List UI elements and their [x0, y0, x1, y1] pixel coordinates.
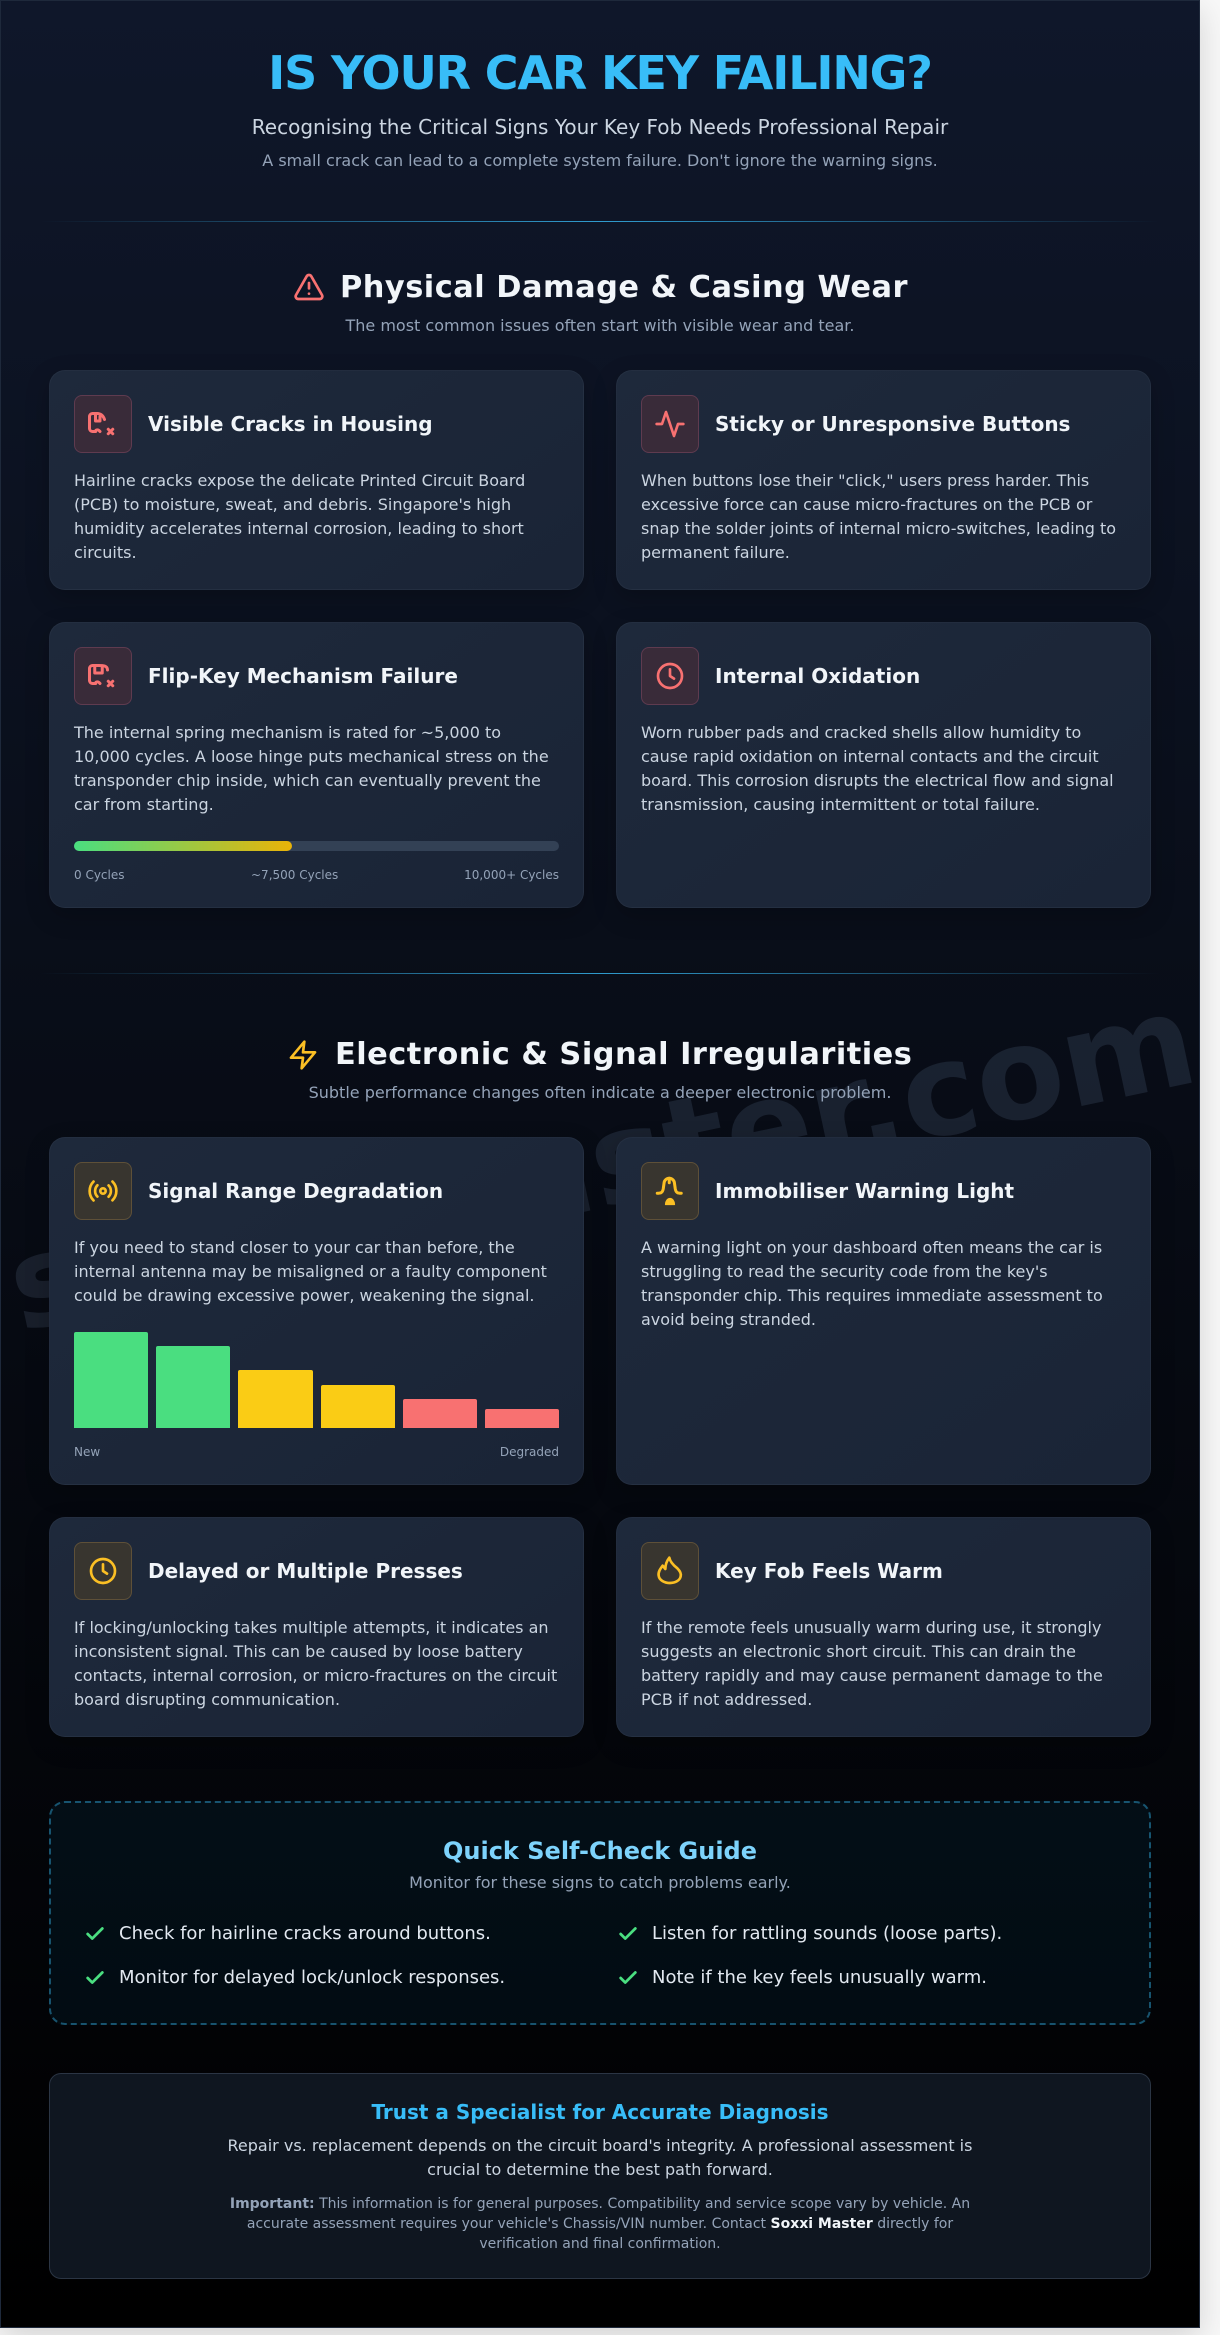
label: degraded: Degraded — [500, 1445, 559, 1459]
important note: verification and final confirmation. — [479, 2236, 721, 2252]
card title: Internal Oxidation — [715, 664, 920, 688]
card text: battery rapidly and may cause permanent damage to the — [641, 1666, 1103, 1685]
card text: struggling to read the security code from the key's — [641, 1262, 1048, 1281]
important note — [230, 2196, 970, 2252]
check icon 2 — [619, 1927, 637, 1940]
card text: could be drawing excessive power, weakening the signal. — [74, 1286, 534, 1305]
card text: PCB if not addressed. — [641, 1690, 812, 1709]
card text — [641, 471, 1116, 562]
card title: Key Fob Feels Warm — [715, 1559, 943, 1583]
icon: broken flip key — [74, 647, 132, 705]
card title: Signal Range Degradation — [148, 1179, 443, 1203]
card text — [74, 1618, 557, 1709]
label: 10000 cycles: 10,000+ Cycles — [464, 868, 559, 882]
check icon 4 — [619, 1971, 637, 1984]
icon: flame — [641, 1542, 699, 1600]
card text: A warning light on your dashboard often means the car is — [641, 1238, 1102, 1257]
self-check subtitle: Monitor for these signs to catch problems early. — [409, 1873, 791, 1892]
card text: When buttons lose their "click," users press harder. This — [641, 471, 1089, 490]
check item 1: Check for hairline cracks around buttons. — [119, 1923, 491, 1944]
specialist text: Repair vs. replacement depends on the circuit board's integrity. A professional assessment is — [228, 2136, 972, 2155]
icon: lightning bolt — [290, 1040, 316, 1070]
card text: transponder chip. This requires immediate assessment to — [641, 1286, 1103, 1305]
card text — [641, 1618, 1103, 1709]
panel: key fob feels warm — [616, 1517, 1151, 1737]
watermark: soxximaster.com — [2, 965, 1200, 1362]
section subtitle: physical damage: The most common issues often start with visible wear and tear. — [345, 316, 855, 335]
card text: If the remote feels unusually warm during use, it strongly — [641, 1618, 1101, 1637]
panel: signal range degradation — [49, 1137, 584, 1485]
card text: If you need to stand closer to your car than before, the — [74, 1238, 515, 1257]
card text — [74, 723, 549, 814]
card text: If locking/unlocking takes multiple attempts, it indicates an — [74, 1618, 549, 1637]
card text: circuits. — [74, 543, 137, 562]
panel: visible cracks in housing — [49, 370, 584, 590]
card text: snap the solder joints of internal micro-switches, leading to — [641, 519, 1116, 538]
check icon 3 — [86, 1971, 104, 1984]
heading: physical damage: Physical Damage & Casing Wear — [340, 270, 908, 305]
check item 3: Monitor for delayed lock/unlock responses. — [119, 1967, 505, 1988]
section subtitle: electronic: Subtle performance changes often indicate a deeper electronic problem. — [309, 1083, 891, 1102]
card title: Sticky or Unresponsive Buttons — [715, 412, 1070, 436]
card text: car from starting. — [74, 795, 214, 814]
card title: Immobiliser Warning Light — [715, 1179, 1014, 1203]
card text — [641, 723, 1114, 814]
specialist title: Trust a Specialist for Accurate Diagnosis — [371, 2100, 829, 2124]
card text — [641, 1238, 1103, 1329]
specialist text: crucial to determine the best path forward. — [427, 2160, 773, 2179]
icon: activity pulse — [641, 395, 699, 453]
important note: Important: This information is for general purposes. Compatibility and service scope vary by vehicle. An — [230, 2196, 970, 2212]
check item 2: Listen for rattling sounds (loose parts). — [652, 1923, 1002, 1944]
card text: transponder chip inside, which can eventually prevent the — [74, 771, 541, 790]
card text: inconsistent signal. This can be caused by loose battery — [74, 1642, 523, 1661]
check icon 1 — [86, 1927, 104, 1940]
heading: electronic: Electronic & Signal Irregularities — [335, 1037, 912, 1072]
card text: cause rapid oxidation on internal contacts and the circuit — [641, 747, 1099, 766]
subtitle: Recognising the Critical Signs Your Key Fob Needs Professional Repair — [252, 115, 948, 139]
card text — [74, 471, 525, 562]
card text: excessive force can cause micro-fractures on the PCB or — [641, 495, 1092, 514]
panel: trust a specialist — [49, 2073, 1151, 2279]
icon: warning bell — [641, 1162, 699, 1220]
bar chart: signal strength — [74, 1332, 559, 1428]
card text: contacts, internal corrosion, or micro-fractures on the circuit — [74, 1666, 557, 1685]
label: 7500 cycles: ~7,500 Cycles — [251, 868, 338, 882]
panel: flip-key failure — [49, 622, 584, 908]
panel: quick self-check guide — [49, 1801, 1151, 2025]
icon: cracked fob — [74, 395, 132, 453]
icon: warning triangle — [294, 274, 324, 300]
icon: clock — [641, 647, 699, 705]
tagline: A small crack can lead to a complete system failure. Don't ignore the warning signs. — [262, 151, 938, 170]
card title: Flip-Key Mechanism Failure — [148, 664, 458, 688]
card text: transmission, causing intermittent or total failure. — [641, 795, 1040, 814]
icon: radio signal — [74, 1162, 132, 1220]
card text: Hairline cracks expose the delicate Printed Circuit Board — [74, 471, 525, 490]
label: new: New — [74, 1445, 100, 1459]
card title: Visible Cracks in Housing — [148, 412, 433, 436]
title: IS YOUR CAR KEY FAILING? — [268, 46, 932, 100]
card text: avoid being stranded. — [641, 1310, 816, 1329]
card text: Worn rubber pads and cracked shells allow humidity to — [641, 723, 1081, 742]
card text: suggests an electronic short circuit. This can drain the — [641, 1642, 1076, 1661]
important note: accurate assessment requires your vehicle's Chassis/VIN number. Contact Soxxi Master directly for — [247, 2216, 953, 2232]
check item 4: Note if the key feels unusually warm. — [652, 1967, 987, 1988]
panel: immobiliser warning light — [616, 1137, 1151, 1485]
panel: sticky buttons — [616, 370, 1151, 590]
panel: internal oxidation — [616, 622, 1151, 908]
card text: humidity accelerates internal corrosion, leading to short — [74, 519, 524, 538]
card text: internal antenna may be misaligned or a faulty component — [74, 1262, 547, 1281]
card text: 10,000 cycles. A loose hinge puts mechanical stress on the — [74, 747, 549, 766]
card text: The internal spring mechanism is rated for ~5,000 to — [74, 723, 501, 742]
card text: permanent failure. — [641, 543, 790, 562]
icon: clock — [74, 1542, 132, 1600]
card title: Delayed or Multiple Presses — [148, 1559, 463, 1583]
self-check title: Quick Self-Check Guide — [443, 1837, 757, 1865]
panel: delayed presses — [49, 1517, 584, 1737]
card text — [74, 1238, 547, 1305]
progress bar — [74, 841, 559, 851]
label: 0 cycles: 0 Cycles — [74, 868, 124, 882]
card text: board disrupting communication. — [74, 1690, 340, 1709]
card text: (PCB) to moisture, sweat, and debris. Singapore's high — [74, 495, 511, 514]
card text: board. This corrosion disrupts the electrical flow and signal — [641, 771, 1114, 790]
specialist text — [228, 2136, 972, 2179]
